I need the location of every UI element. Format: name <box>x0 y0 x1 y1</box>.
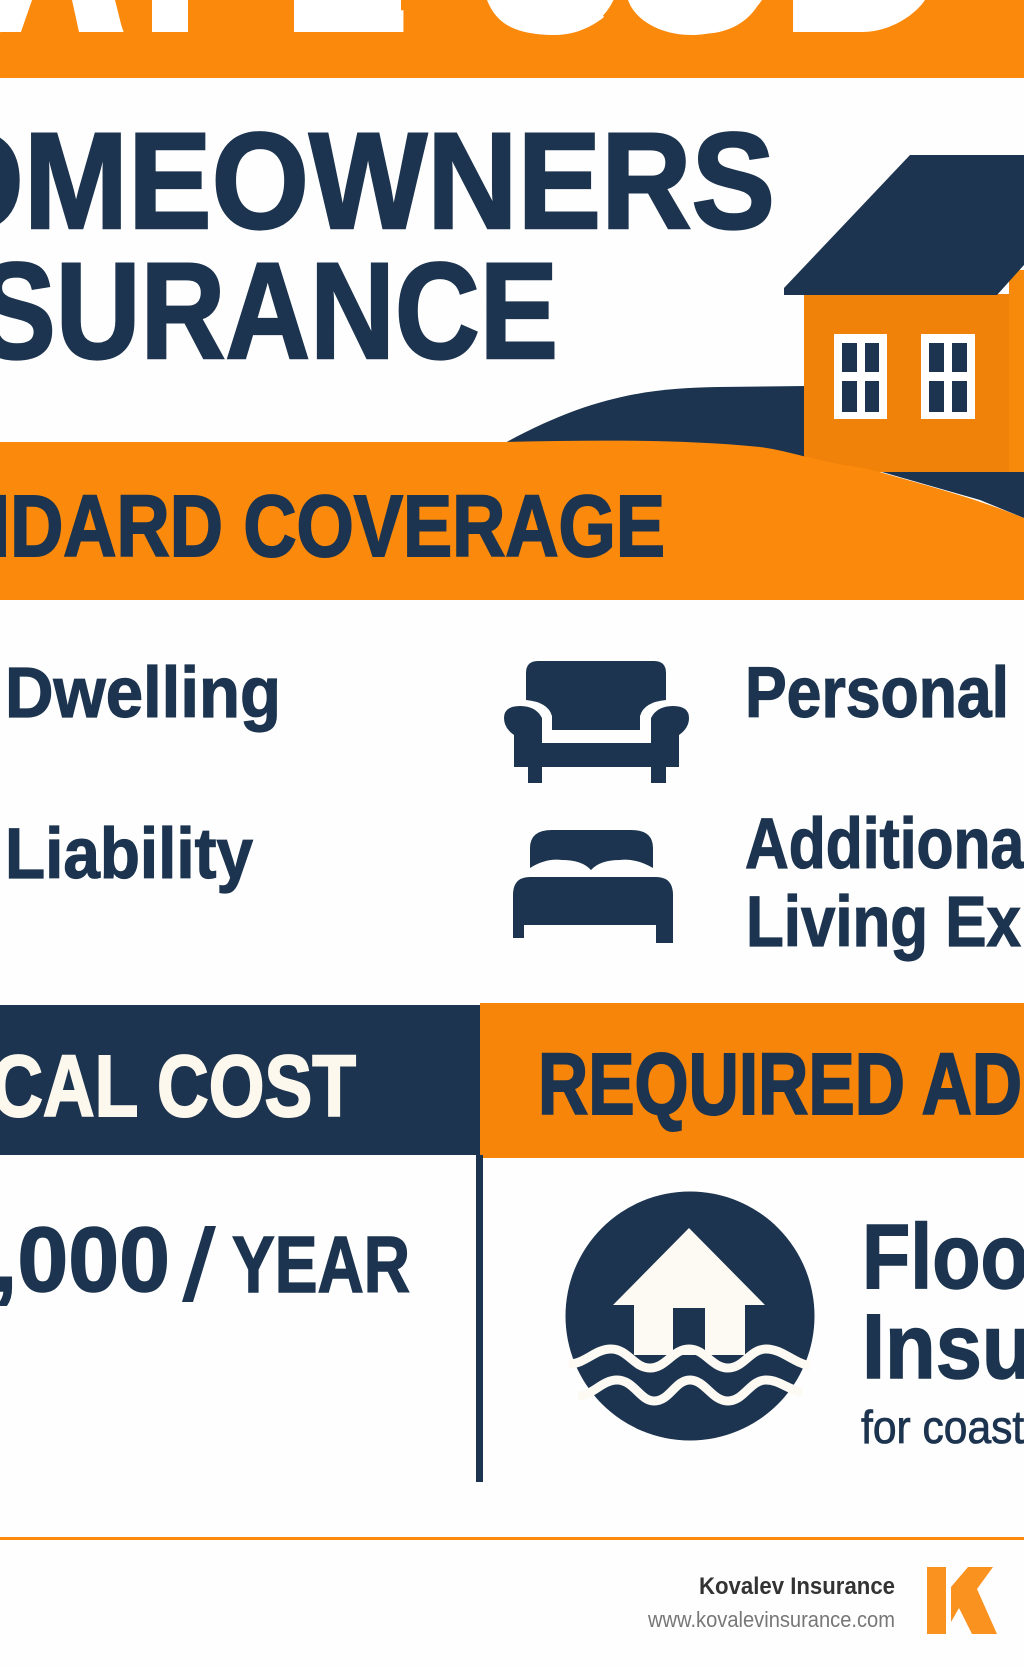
coverage item: Liability: Liability <box>5 815 253 894</box>
footer: company name and website <box>647 1573 895 1632</box>
footer rule <box>0 1537 1024 1540</box>
icon: flooded house <box>566 1192 814 1440</box>
cost value per year <box>0 1209 410 1311</box>
header: Required Add-ons <box>480 1003 1024 1158</box>
section banner: Standard Coverage <box>0 441 1024 600</box>
illustration: house on hill <box>503 155 1024 518</box>
coverage item: Dwelling: Dwelling <box>5 654 281 733</box>
title: Homeowners Insurance <box>0 105 775 388</box>
text: Flood Insurance for coastal homes <box>861 1206 1024 1453</box>
window: right <box>921 334 975 419</box>
coverage item: Additional Living Expenses <box>745 805 1024 962</box>
icon: armchair <box>504 661 689 783</box>
footer: company name and website: Kovalev Insurance <box>699 1573 895 1600</box>
cost value per year: YEAR <box>232 1220 410 1309</box>
header: Typical Cost <box>0 1005 480 1155</box>
icon: bed <box>513 830 673 943</box>
column divider <box>476 1155 483 1482</box>
footer: company name and website: www.kovalevinsurance.com <box>647 1607 895 1632</box>
logo: K mark <box>927 1567 997 1634</box>
window: left <box>834 334 887 419</box>
